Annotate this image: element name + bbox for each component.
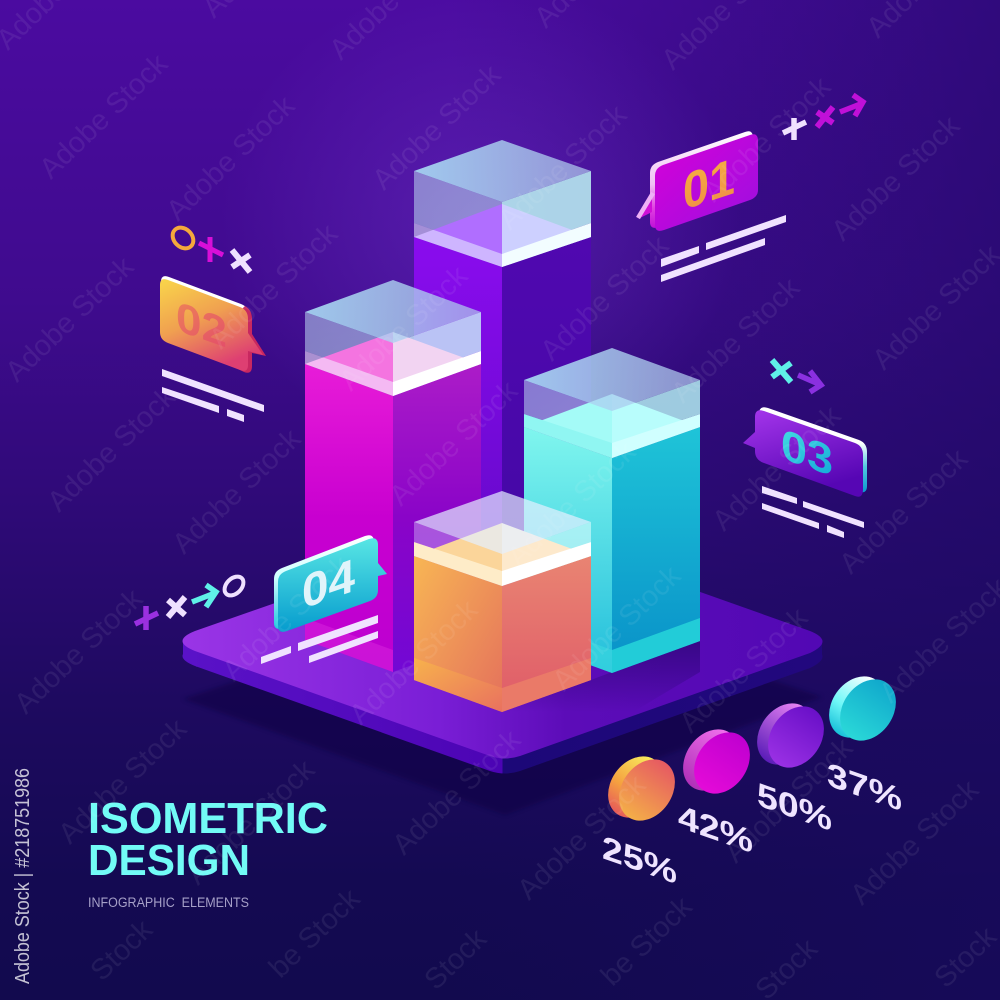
disc 50%	[746, 693, 835, 778]
platform side	[182, 540, 822, 774]
callout 01	[638, 95, 863, 282]
bubble 01 tail	[640, 193, 652, 218]
watermark: Adobe Stock	[383, 375, 524, 512]
title: ISOMETRIC	[88, 794, 328, 843]
watermark: Adobe Stock	[825, 110, 966, 247]
watermark: Adobe Stock	[0, 251, 140, 388]
bar: purple tall	[414, 140, 591, 620]
watermark: Adobe Stock	[343, 594, 484, 731]
watermark: Adobe Stock	[160, 90, 301, 227]
text lines 04	[261, 615, 378, 664]
subtitle: INFOGRAPHIC ELEMENTS	[88, 895, 249, 910]
watermark: Adobe Stock	[844, 774, 985, 911]
watermark: Adobe Stock	[833, 443, 974, 580]
symbols 01	[783, 95, 863, 140]
bubble 02 face	[160, 279, 263, 371]
watermark: Adobe Stock	[696, 71, 837, 208]
platform	[182, 526, 822, 815]
number 03: 03	[781, 420, 833, 486]
bubble 01 tail highlight	[638, 193, 653, 218]
watermark: be Stock	[595, 890, 699, 992]
watermark: Adobe Stock	[203, 218, 344, 355]
disc 42%	[672, 719, 761, 804]
watermark: Adobe Stock	[534, 230, 675, 367]
watermark: Adobe Stock	[216, 550, 357, 687]
bubble 01 edge	[650, 131, 753, 228]
watermark: Adobe Stock	[665, 272, 806, 409]
disc chart	[597, 666, 907, 892]
watermark: Adobe Stock	[511, 769, 652, 906]
bar: orange cube	[414, 491, 591, 712]
title: DESIGN	[88, 836, 250, 885]
glow behind bars	[220, 0, 740, 460]
bubble 02 white edge	[161, 276, 249, 357]
text lines 01	[661, 215, 786, 282]
number 01: 01	[683, 148, 735, 222]
disc 37%	[818, 666, 907, 751]
bar: magenta	[305, 280, 481, 672]
disc 25%	[597, 746, 686, 831]
callout 03	[743, 360, 867, 538]
symbols 04	[135, 573, 247, 630]
watermark: Adobe Stock	[166, 423, 307, 560]
watermark: Adobe Stock	[501, 436, 642, 573]
watermark: Adobe Stock	[180, 754, 321, 891]
text lines 03	[762, 486, 864, 538]
watermark: Adobe Stock	[718, 732, 859, 869]
callout 02	[160, 224, 266, 422]
number 02: 02	[176, 293, 227, 358]
text lines 02	[162, 369, 264, 422]
bubble 04 face	[278, 538, 387, 632]
bar: cyan	[524, 348, 700, 673]
watermark: Adobe Stock	[33, 48, 174, 185]
symbols 02	[169, 224, 250, 272]
watermark: Adobe Stock	[366, 59, 507, 196]
bar shadows	[502, 641, 700, 712]
watermark: be Stock	[263, 882, 367, 984]
watermark: Adobe Stock	[706, 400, 847, 537]
callout 04	[135, 535, 387, 664]
watermark: Adobe Stock	[386, 724, 527, 861]
label 37%: 37%	[827, 756, 902, 819]
watermark: Adobe Stock	[52, 713, 193, 850]
watermark: Adobe Stock	[546, 560, 687, 697]
bubble 02 red edge	[200, 306, 266, 373]
bubble 03 edge	[759, 407, 867, 492]
watermark: Stock	[419, 922, 493, 996]
watermark: Adobe Stock	[333, 260, 474, 397]
platform right corner side	[808, 642, 822, 669]
watermark: Stock	[85, 913, 159, 987]
bubble 04 edge	[274, 535, 374, 629]
label 42%: 42%	[678, 798, 753, 861]
label 50%: 50%	[757, 776, 832, 839]
platform top	[182, 526, 822, 758]
symbols 03	[772, 360, 821, 392]
title	[88, 794, 328, 885]
side stock credit: Adobe Stock | #218751986	[12, 768, 34, 984]
label 25%: 25%	[602, 829, 677, 892]
platform left corner side	[183, 641, 197, 667]
bubble 01 face	[655, 134, 758, 231]
watermark: Adobe Stock	[8, 583, 149, 720]
number 04: 04	[302, 549, 355, 620]
watermark: Adobe Stock	[492, 99, 633, 236]
platform shadow	[183, 590, 822, 815]
watermark: Adobe Stock	[673, 602, 814, 739]
bubble 03 face	[743, 410, 863, 497]
watermark: Adobe Stock	[41, 381, 182, 518]
